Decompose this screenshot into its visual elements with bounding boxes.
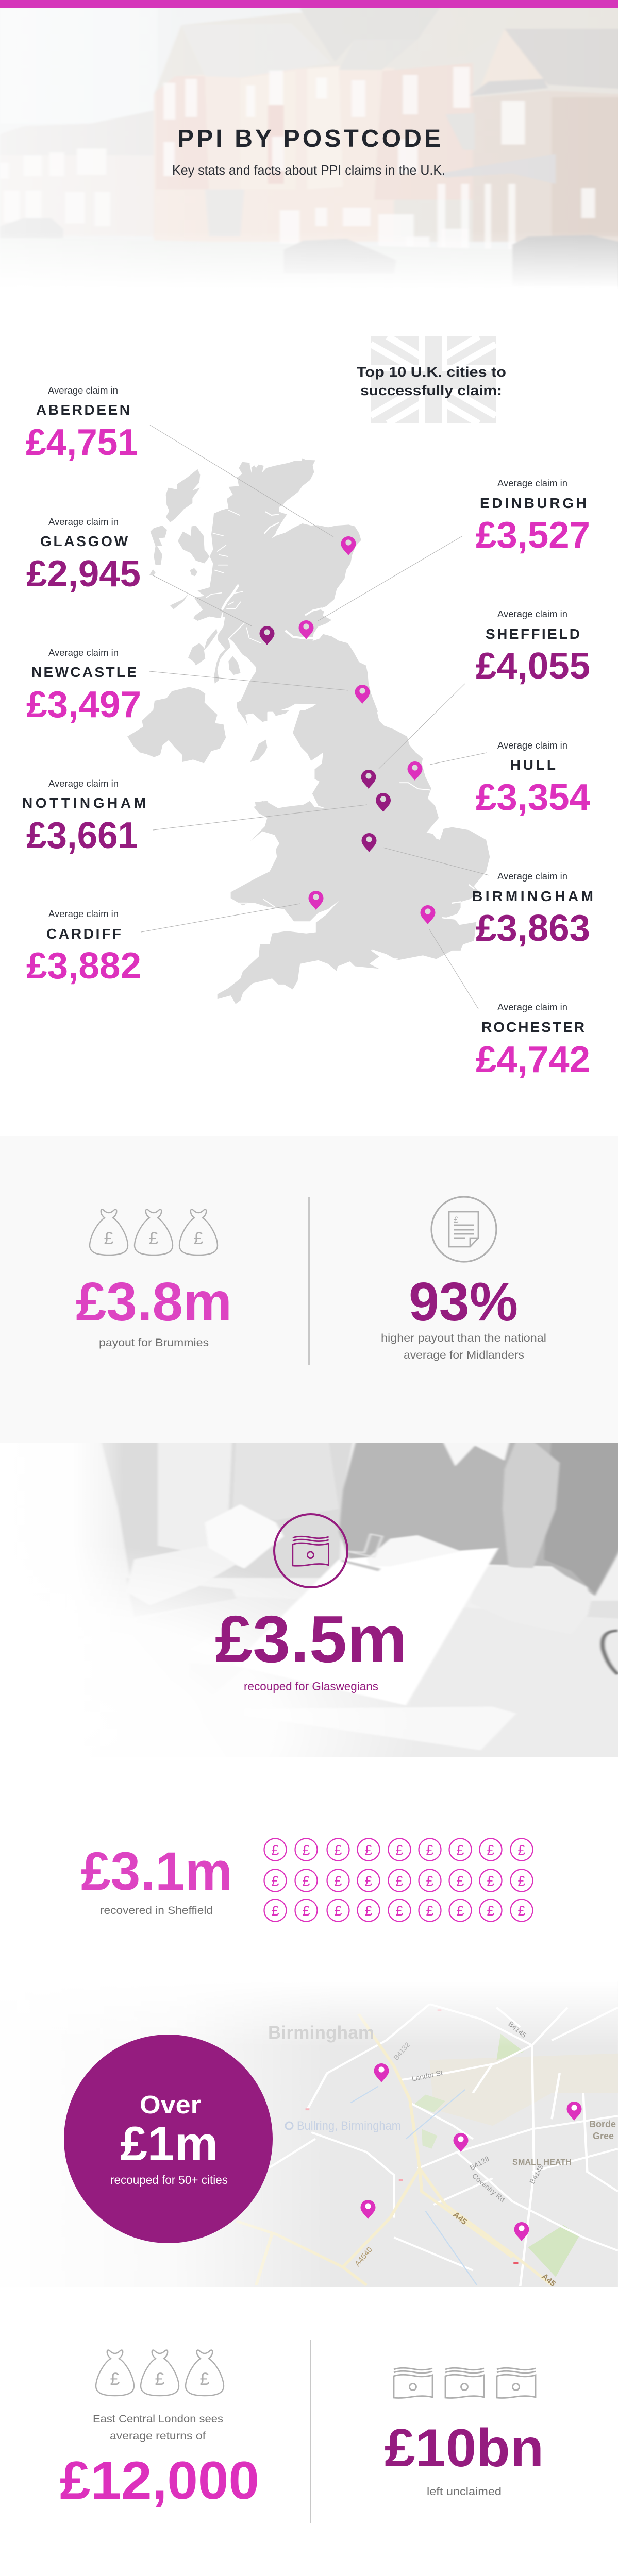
city stat: Glasgow: £2,945 — [26, 553, 141, 595]
pin: Hull — [407, 761, 423, 781]
map labels: A45 — [540, 2272, 557, 2289]
map labels: B4128 — [468, 2154, 491, 2172]
icon grid: pound coins: £ — [395, 1903, 404, 1919]
icon grid: pound coins: £ — [271, 1903, 279, 1919]
callout: over £1m — [64, 2035, 273, 2243]
city stat: Rochester: £4,742 — [476, 1039, 590, 1080]
icon grid: pound coins: £ — [364, 1842, 373, 1858]
city stat: Rochester: Average claim in — [497, 1002, 567, 1012]
city stat: Sheffield: SHEFFIELD — [486, 626, 580, 642]
map labels: B4145 — [507, 2020, 528, 2039]
stat: £3.1m: £3.1m — [81, 1841, 232, 1902]
city stat: Birmingham: BIRMINGHAM — [472, 888, 593, 904]
icon grid: pound coins: £ — [334, 1873, 342, 1889]
icon grid: pound coins: £ — [487, 1903, 495, 1919]
city stat: Sheffield: Average claim in — [497, 609, 567, 619]
map labels: Bullring, Birmingham — [297, 2119, 401, 2133]
city stat: Edinburgh: EDINBURGH — [480, 495, 587, 511]
header photo: terraced houses — [0, 0, 618, 289]
caption: recovered in Sheffield: recovered in Sheffield — [100, 1905, 213, 1917]
map pins — [361, 2063, 581, 2241]
caption: payout for Brummies: payout for Brummies — [99, 1337, 209, 1349]
icon grid: pound coins: £ — [395, 1873, 404, 1889]
icon: money bags: £ — [104, 1229, 114, 1248]
icon: money bags: £ — [194, 1229, 204, 1248]
city stat: Aberdeen: Average claim in — [48, 385, 118, 396]
top accent bar — [0, 0, 618, 8]
stat: £10bn: £10bn — [385, 2418, 544, 2478]
icon grid: pound coins: £ — [302, 1842, 310, 1858]
icon: document in circle — [431, 1197, 496, 1262]
city stat: Edinburgh: £3,527 — [476, 515, 590, 556]
caption: East Central London: average returns of — [110, 2430, 206, 2442]
city stat: Aberdeen — [26, 385, 138, 463]
icon grid: pound coins — [264, 1838, 533, 1922]
pin: Cardiff — [308, 891, 324, 910]
icon grid: pound coins: £ — [456, 1903, 464, 1919]
city stat: Newcastle — [26, 648, 141, 725]
city stat: Rochester: ROCHESTER — [481, 1019, 584, 1035]
icon grid: pound coins: £ — [487, 1873, 495, 1889]
city stat: Sheffield — [476, 609, 590, 687]
pin: Nottingham — [376, 793, 391, 812]
heading: top 10 cities — [357, 364, 506, 398]
icon grid: pound coins: £ — [517, 1842, 526, 1858]
city stat: Hull: Average claim in — [497, 740, 567, 751]
map labels: B4145 — [528, 2163, 545, 2185]
icon: money bags — [90, 1210, 218, 1255]
city stat: Hull — [476, 740, 590, 818]
city stat: Rochester — [476, 1002, 590, 1080]
pin: Newcastle — [355, 685, 370, 704]
icon: money bags — [96, 2350, 224, 2396]
city stat: Newcastle: NEWCASTLE — [31, 664, 137, 680]
map pins — [260, 536, 435, 924]
city stat: Nottingham — [22, 778, 146, 856]
map labels: A45 — [451, 2210, 469, 2227]
map labels: A4540 — [353, 2245, 374, 2268]
panel: paperwork photo — [0, 1431, 618, 1769]
icon: union jack flag — [371, 336, 496, 423]
icon grid: pound coins: £ — [271, 1842, 279, 1858]
city stat: Birmingham — [472, 871, 593, 949]
heading: top 10 cities: successfully claim: — [360, 383, 502, 398]
icon grid: pound coins: £ — [426, 1842, 434, 1858]
city stat: Hull: £3,354 — [476, 777, 590, 818]
map labels: Birmingham — [268, 2023, 374, 2043]
icon grid: pound coins: £ — [334, 1842, 342, 1858]
city stat: Nottingham: Average claim in — [48, 778, 119, 789]
caption: higher payout — [381, 1332, 546, 1361]
city stat: Birmingham: Average claim in — [497, 871, 567, 882]
city stat: Sheffield: £4,055 — [476, 646, 590, 687]
icon grid: pound coins: £ — [456, 1873, 464, 1889]
map labels: SMALL HEATH — [512, 2157, 572, 2167]
icon grid: pound coins: £ — [517, 1903, 526, 1919]
stat: £3.8m: £3.8m — [76, 1272, 232, 1332]
caption: East Central London — [93, 2413, 223, 2442]
city stat: Edinburgh: Average claim in — [497, 478, 567, 488]
icon: money bags: £ — [155, 2369, 165, 2389]
icon grid: pound coins: £ — [395, 1842, 404, 1858]
caption: higher payout: average for Midlanders — [404, 1349, 524, 1361]
icon grid: pound coins: £ — [426, 1873, 434, 1889]
city stat: Birmingham: £3,863 — [476, 908, 590, 949]
icon: banknotes in circle — [274, 1514, 347, 1587]
city stat: Nottingham: NOTTINGHAM — [22, 795, 146, 811]
subtitle: Key stats and facts about PPI claims in the U.K. — [172, 162, 445, 178]
icon grid: pound coins: £ — [364, 1903, 373, 1919]
icon grid: pound coins: £ — [364, 1873, 373, 1889]
panel: deadline photo — [0, 2568, 618, 2576]
leader lines — [141, 425, 489, 1009]
city stat: Newcastle: Average claim in — [48, 648, 119, 658]
map labels: Coventry Rd — [471, 2172, 507, 2204]
pin: Sheffield — [361, 770, 376, 789]
panel: Birmingham street map — [0, 1981, 618, 2289]
city stat: Glasgow: Average claim in — [48, 517, 119, 527]
city stat: Aberdeen: ABERDEEN — [36, 402, 130, 418]
map labels: Landor St — [411, 2069, 443, 2083]
city stat: Nottingham: £3,661 — [26, 815, 138, 856]
stat: £3.5m: £3.5m — [215, 1602, 407, 1676]
icon: money bags: £ — [149, 1229, 159, 1248]
stat: £12,000: £12,000 — [60, 2451, 259, 2511]
title: PPI BY POSTCODE — [177, 125, 441, 152]
pin: Edinburgh — [299, 620, 313, 639]
city stat: Cardiff — [26, 909, 141, 987]
city stat: Hull: HULL — [510, 757, 556, 773]
map labels — [268, 2020, 616, 2289]
caption: higher payout: higher payout than the national — [381, 1332, 546, 1344]
city stat: Aberdeen: £4,751 — [26, 422, 138, 463]
icon grid: pound coins: £ — [302, 1903, 310, 1919]
pin: Birmingham — [362, 833, 376, 852]
icon grid: pound coins: £ — [334, 1903, 342, 1919]
city stat: Cardiff: £3,882 — [26, 945, 141, 987]
icon grid: pound coins: £ — [426, 1903, 434, 1919]
caption: East Central London: East Central London sees — [93, 2413, 223, 2425]
pin: Rochester — [421, 905, 435, 924]
callout: over £1m: Over — [140, 2091, 201, 2119]
stat: 93%: 93% — [409, 1272, 518, 1332]
city stat: Edinburgh — [476, 478, 590, 556]
icon: money bags: £ — [200, 2369, 210, 2389]
panel: London and unclaimed stats — [60, 2340, 544, 2523]
map labels: Gree — [593, 2131, 614, 2141]
caption: left unclaimed: left unclaimed — [427, 2486, 502, 2498]
callout: over £1m: recouped for 50+ cities — [110, 2173, 228, 2187]
city stat: Glasgow — [26, 517, 141, 595]
heading: top 10 cities: Top 10 U.K. cities to — [357, 364, 506, 380]
pin: Aberdeen — [341, 536, 356, 555]
map labels: B4132 — [392, 2040, 411, 2062]
city stat: Glasgow: GLASGOW — [40, 533, 128, 549]
callout: over £1m: £1m — [120, 2116, 218, 2171]
icon grid: pound coins: £ — [456, 1842, 464, 1858]
icon grid: pound coins: £ — [487, 1842, 495, 1858]
icon grid: pound coins: £ — [517, 1873, 526, 1889]
icon: document in circle: £ — [454, 1215, 459, 1225]
city stat: Cardiff: CARDIFF — [46, 926, 121, 942]
city stat: Newcastle: £3,497 — [26, 684, 141, 725]
panel: Brummies and Midlanders stats — [0, 1136, 618, 1443]
city stat: Cardiff: Average claim in — [48, 909, 119, 919]
caption: recouped for Glaswegians: recouped for Glaswegians — [244, 1680, 378, 1693]
map labels: Borde — [589, 2119, 616, 2129]
icon grid: pound coins: £ — [271, 1873, 279, 1889]
map of the UK — [127, 458, 490, 1004]
icon: banknotes — [394, 2368, 536, 2398]
pin: Glasgow — [260, 626, 274, 645]
icon: money bags: £ — [110, 2369, 120, 2389]
icon grid: pound coins: £ — [302, 1873, 310, 1889]
